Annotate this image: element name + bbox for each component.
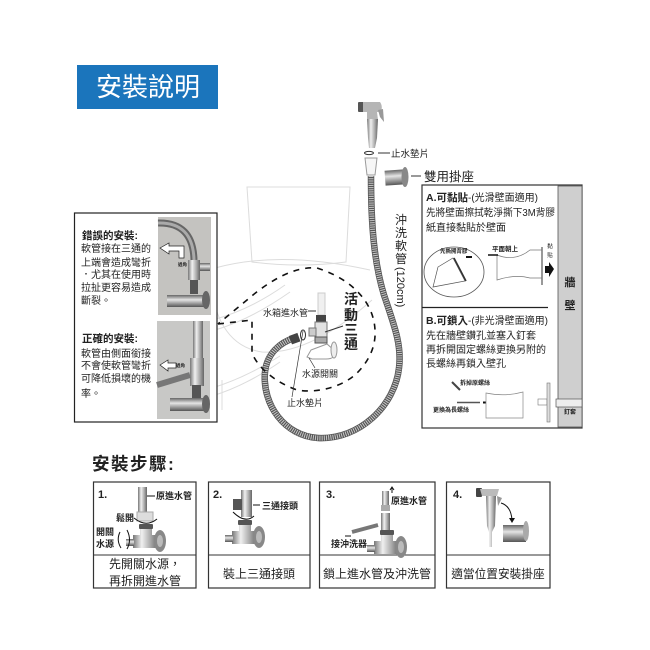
hose label: (120cm)	[394, 267, 406, 307]
option A diagram: 平面朝上	[492, 244, 518, 253]
step 4: 4.	[453, 489, 462, 501]
hose label: 沖	[395, 213, 407, 227]
option A text: 紙直接黏貼於壁面	[426, 221, 506, 234]
three-way connector and valve	[225, 490, 265, 548]
step 1: 先開關水源，	[109, 557, 181, 571]
step 3	[320, 482, 435, 588]
correct installation text	[81, 332, 151, 400]
option B text: B.可鎖入-(非光滑壁面適用)	[426, 314, 548, 327]
option A text: A.可黏貼-(光滑壁面適用)	[426, 191, 538, 204]
option B diagram: 更換為長螺絲	[433, 406, 469, 414]
step 3: 原進水管	[391, 495, 427, 506]
step 1	[94, 482, 196, 588]
three-way fitting	[289, 293, 337, 359]
option B diagram	[433, 379, 582, 422]
wall strip: 釘套	[564, 408, 576, 416]
hose label	[394, 213, 407, 307]
washer label: 止水墊片	[391, 148, 429, 160]
label: movable three-way: 三	[344, 322, 358, 338]
label: movable three-way	[344, 291, 358, 352]
hose label: 洗	[395, 226, 407, 240]
step 4: 適當位置安裝掛座	[451, 567, 545, 581]
step 1 labels	[96, 490, 192, 549]
option B text: 長螺絲再鎖入壁孔	[426, 357, 506, 370]
spray head and mount	[476, 488, 529, 547]
step 2: 裝上三通接頭	[223, 566, 295, 581]
step 3: 鎖上進水管及沖洗管	[323, 566, 431, 581]
double-use mount: 雙用掛座	[424, 169, 474, 184]
hose label: 管	[395, 251, 407, 266]
photo: wrong installation: 過角	[178, 261, 187, 268]
option B text: 再拆開固定螺絲更換另附的	[426, 343, 546, 356]
toilet illustration	[210, 187, 372, 410]
correct installation text: 正確的安裝:	[82, 332, 138, 345]
photo: wrong installation	[158, 217, 211, 315]
panel: mounting options	[422, 185, 582, 428]
wrong installation text: 拉扯更容易造成	[81, 281, 151, 294]
wrong installation text: 軟管接在三通的	[81, 242, 151, 255]
option A diagram	[424, 242, 554, 297]
option A text	[426, 191, 555, 234]
exploded fittings	[345, 487, 407, 558]
step 3: 接沖洗器	[331, 538, 367, 549]
title	[77, 65, 218, 109]
label: movable three-way: 活	[344, 291, 358, 307]
option B text	[426, 314, 548, 370]
step 2: 三通接頭	[262, 500, 298, 511]
hose label: 軟	[395, 238, 407, 253]
step 1 labels: 鬆開	[116, 512, 134, 523]
correct installation text: 軟管由側面銜接	[81, 347, 151, 360]
wall strip: 牆	[564, 275, 576, 289]
title: 安裝說明	[96, 72, 200, 102]
step 4	[446, 482, 550, 588]
label: movable three-way: 動	[344, 307, 358, 323]
wall strip: 壁	[564, 298, 576, 312]
option A diagram: 黏	[547, 242, 553, 250]
step 1 labels: 水源	[96, 538, 114, 549]
correct installation text: 可降低損壞的機	[81, 372, 151, 385]
wrong installation text: 錯誤的安裝:	[82, 229, 138, 242]
double-use mount	[385, 167, 474, 187]
option B text: 先在牆壁鑽孔並塞入釘套	[426, 329, 536, 342]
step 1: 1.	[98, 489, 107, 501]
option A diagram: 貼	[547, 251, 553, 259]
spray head	[358, 102, 384, 148]
callout labels	[263, 307, 343, 408]
pipe and valve	[118, 487, 166, 552]
callout labels: 止水墊片	[287, 397, 323, 408]
hose connector	[365, 158, 377, 175]
correct installation text: 率。	[81, 387, 101, 400]
step 3: 3.	[326, 489, 335, 501]
heading: installation steps: 安裝步驟:	[92, 454, 175, 474]
wrong installation text	[81, 229, 151, 307]
step 2	[208, 482, 310, 588]
step 1 labels: 開關	[96, 527, 114, 537]
photo: correct installation: 過角	[176, 362, 185, 369]
callout labels: 水箱進水管	[263, 307, 308, 318]
wrong installation text: 斷裂。	[81, 294, 111, 307]
wrong installation text: 上端會造成彎折	[81, 256, 151, 269]
panel: wrong and correct installation	[74, 213, 217, 422]
correct installation text: 不會使軟管彎折	[81, 359, 151, 372]
callout labels: 水源開關	[302, 368, 338, 379]
photo: correct installation	[157, 321, 210, 419]
hose	[265, 176, 400, 438]
wrong installation text: ．尤其在使用時	[81, 268, 151, 281]
wall strip	[558, 186, 582, 427]
dashed callout circle	[218, 268, 375, 391]
step 1: 再拆開進水管	[109, 573, 181, 588]
label: movable three-way: 通	[344, 336, 358, 352]
step 1 labels: 原進水管	[156, 490, 192, 501]
option A diagram: 先撕開背膠	[440, 247, 468, 255]
washer label	[364, 148, 429, 160]
option A text: 先將壁面擦拭乾淨撕下3M背膠	[426, 206, 555, 219]
option B diagram: 拆掉原螺絲	[460, 379, 490, 387]
step 2: 2.	[213, 489, 222, 501]
